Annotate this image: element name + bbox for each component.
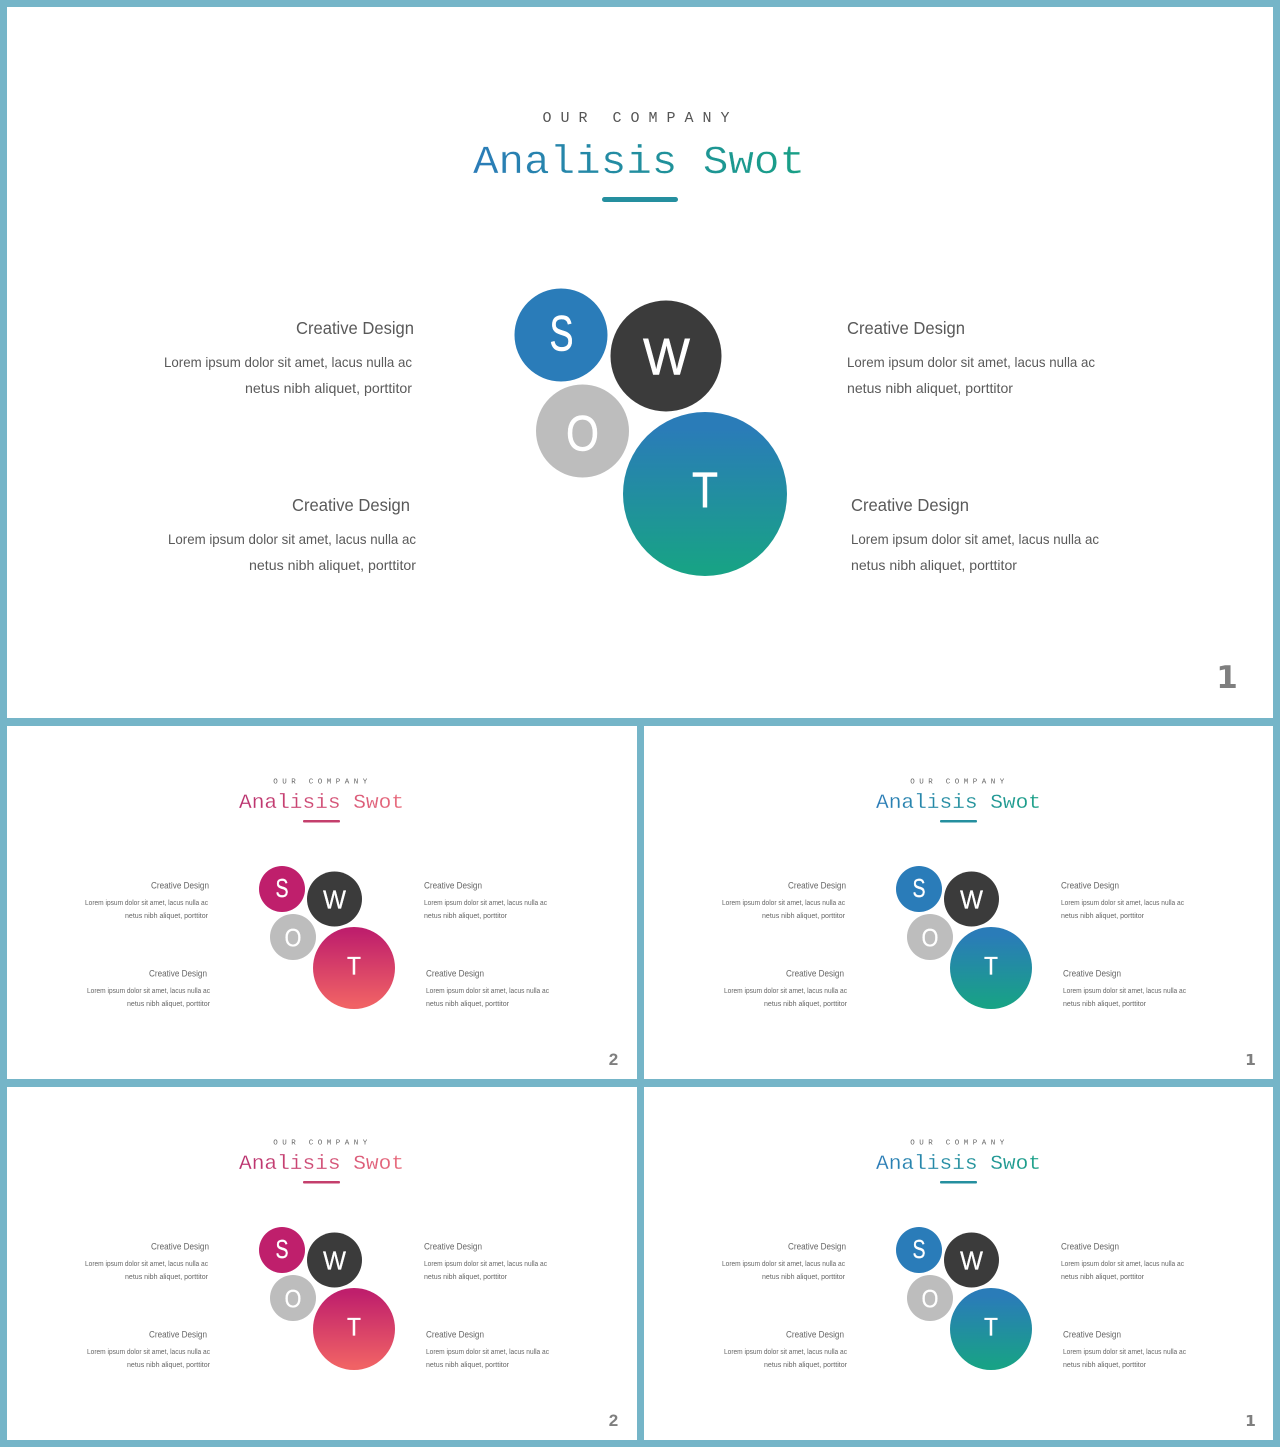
page number: 2: [609, 1411, 618, 1430]
title: Analisis Swot: [239, 792, 404, 815]
text block: top left: [722, 1242, 846, 1281]
text block: bottom right: netus nibh aliquet, porttitor: [1063, 1001, 1147, 1008]
text block: bottom right: [1063, 1330, 1187, 1369]
text block: top left: Lorem ipsum dolor sit amet, lacus nulla ac: [722, 1261, 846, 1268]
text block: top right: Lorem ipsum dolor sit amet, lacus nulla ac: [1061, 900, 1185, 907]
text block: bottom left: [724, 968, 848, 1008]
text block: bottom left: netus nibh aliquet, porttitor: [764, 1001, 848, 1008]
eyebrow: our company: OUR COMPANY: [910, 778, 1005, 786]
circle: S: [896, 1227, 942, 1273]
panel: main slide (blue): [7, 7, 1273, 718]
text block: top left: netus nibh aliquet, porttitor: [762, 913, 846, 920]
text block: bottom right: Lorem ipsum dolor sit amet, lacus nulla ac: [426, 988, 550, 995]
text block: bottom right: Lorem ipsum dolor sit amet, lacus nulla ac: [426, 1349, 550, 1356]
text block: top left: netus nibh aliquet, porttitor: [762, 1274, 846, 1281]
text block: top right: [1061, 880, 1185, 920]
panel: small slide bottom left (pink): [7, 1087, 637, 1440]
title underline: [303, 820, 340, 822]
circle: O: [270, 1275, 316, 1321]
text block: bottom right: Creative Design: [426, 1330, 484, 1340]
text block: top left: [722, 880, 846, 920]
page number: 1: [1245, 1051, 1256, 1069]
circle: T: T: [984, 1314, 998, 1342]
circle: O: [270, 914, 316, 960]
circle: O: [907, 914, 953, 960]
eyebrow: our company: OUR COMPANY: [273, 778, 368, 786]
text block: top left: [164, 318, 414, 396]
circle: S: [514, 288, 608, 382]
text block: top left: Lorem ipsum dolor sit amet, lacus nulla ac: [164, 354, 412, 370]
text block: top left: netus nibh aliquet, porttitor: [125, 1274, 209, 1281]
text block: bottom left: netus nibh aliquet, porttitor: [764, 1362, 848, 1369]
title underline: [940, 1181, 977, 1184]
text block: bottom right: Lorem ipsum dolor sit amet, lacus nulla ac: [1063, 1349, 1187, 1356]
text block: top right: Creative Design: [847, 318, 965, 338]
text block: bottom right: Creative Design: [426, 968, 484, 978]
text block: bottom right: [426, 968, 550, 1008]
circle: T: [623, 412, 787, 576]
text block: top right: Creative Design: [1061, 1242, 1119, 1252]
text block: top left: Creative Design: [788, 1242, 846, 1252]
page number: 1: [1245, 1412, 1256, 1430]
title underline: [940, 820, 977, 822]
circle: S: [259, 866, 305, 912]
text block: top left: Lorem ipsum dolor sit amet, lacus nulla ac: [85, 1261, 209, 1268]
circle: W: W: [323, 1246, 346, 1276]
text block: bottom left: Lorem ipsum dolor sit amet, lacus nulla ac: [87, 1349, 211, 1356]
circle: O: O: [922, 924, 938, 952]
text block: bottom left: Lorem ipsum dolor sit amet, lacus nulla ac: [87, 988, 211, 995]
circle: W: [944, 1232, 999, 1288]
circle: O: O: [922, 1286, 938, 1314]
text block: bottom left: netus nibh aliquet, porttitor: [127, 1362, 211, 1369]
circle: O: O: [284, 1286, 302, 1314]
eyebrow: our company: OUR COMPANY: [273, 1140, 368, 1148]
text block: bottom right: netus nibh aliquet, porttitor: [1063, 1362, 1147, 1369]
title: Analisis Swot: [876, 792, 1041, 815]
title: Analisis Swot: [239, 1153, 404, 1176]
panel: small slide top left (pink): [7, 726, 637, 1079]
text block: bottom right: Creative Design: [1063, 968, 1121, 978]
text block: bottom right: netus nibh aliquet, porttitor: [426, 1001, 510, 1008]
title: Analisis Swot: [473, 141, 805, 186]
title: Analisis Swot: [876, 1153, 1041, 1176]
text block: bottom left: Lorem ipsum dolor sit amet, lacus nulla ac: [724, 1349, 848, 1356]
text block: top right: netus nibh aliquet, porttitor: [424, 1274, 508, 1281]
page number: 1: [1216, 660, 1238, 696]
circle: T: [313, 1288, 395, 1370]
title underline: [303, 1181, 340, 1184]
circle: W: W: [643, 328, 690, 386]
circle: S: S: [912, 1234, 926, 1264]
circle: T: [313, 927, 395, 1009]
text block: top right: Creative Design: [424, 880, 482, 890]
circle: S: S: [276, 1234, 288, 1264]
circle: T: [950, 1288, 1032, 1370]
text block: top left: [85, 1242, 209, 1281]
circle: S: [896, 866, 942, 912]
text block: bottom left: Creative Design: [786, 1330, 844, 1340]
circle: T: T: [692, 462, 718, 518]
circle: W: [307, 872, 362, 926]
text block: top left: Creative Design: [296, 318, 414, 338]
circle: O: O: [566, 406, 599, 462]
circle: S: S: [550, 306, 574, 362]
text block: bottom right: Lorem ipsum dolor sit amet, lacus nulla ac: [1063, 988, 1187, 995]
text block: bottom right: Lorem ipsum dolor sit amet, lacus nulla ac: [851, 531, 1099, 547]
text block: top right: netus nibh aliquet, porttitor: [424, 913, 508, 920]
circle: S: [259, 1227, 305, 1273]
text block: bottom left: Lorem ipsum dolor sit amet, lacus nulla ac: [724, 988, 848, 995]
text block: top right: Creative Design: [1061, 880, 1119, 890]
text block: top right: netus nibh aliquet, porttitor: [1061, 1274, 1145, 1281]
text block: top left: Creative Design: [788, 880, 846, 890]
text block: top right: Lorem ipsum dolor sit amet, lacus nulla ac: [424, 900, 548, 907]
circle: W: [307, 1232, 362, 1288]
text block: top left: Lorem ipsum dolor sit amet, lacus nulla ac: [85, 900, 209, 907]
text block: bottom left: Creative Design: [149, 968, 207, 978]
text block: top right: netus nibh aliquet, porttitor: [847, 380, 1013, 396]
text block: bottom left: Creative Design: [786, 968, 844, 978]
circle: W: [944, 872, 999, 926]
title underline: [602, 197, 678, 202]
text block: bottom right: [1063, 968, 1187, 1008]
text block: top right: [1061, 1242, 1185, 1281]
text block: bottom right: [851, 495, 1099, 573]
text block: top right: netus nibh aliquet, porttitor: [1061, 913, 1145, 920]
circle: O: [907, 1275, 953, 1321]
circle: T: [950, 927, 1032, 1009]
text block: top left: netus nibh aliquet, porttitor: [125, 913, 209, 920]
text block: bottom right: netus nibh aliquet, porttitor: [851, 557, 1017, 573]
circle: W: W: [960, 884, 983, 914]
circle: S: S: [912, 873, 926, 903]
text block: top left: netus nibh aliquet, porttitor: [245, 380, 412, 396]
eyebrow: our company: OUR COMPANY: [542, 110, 730, 127]
circle: W: W: [960, 1246, 983, 1276]
circle: S: S: [276, 873, 288, 903]
text block: top left: Creative Design: [151, 880, 209, 890]
panel: small slide top right (blue): [644, 726, 1273, 1079]
text block: bottom left: netus nibh aliquet, porttitor: [127, 1001, 211, 1008]
text block: top right: [847, 318, 1095, 396]
text block: top left: Lorem ipsum dolor sit amet, lacus nulla ac: [722, 900, 846, 907]
text block: bottom left: [168, 495, 416, 573]
text block: bottom left: [724, 1330, 848, 1369]
text block: top right: [424, 880, 548, 920]
text block: bottom right: netus nibh aliquet, porttitor: [426, 1362, 510, 1369]
text block: top left: Creative Design: [151, 1242, 209, 1252]
circle: W: [610, 300, 722, 412]
circle: O: [536, 384, 629, 478]
circle: T: T: [347, 1314, 361, 1342]
text block: bottom right: Creative Design: [851, 495, 969, 515]
text block: top right: Lorem ipsum dolor sit amet, lacus nulla ac: [1061, 1261, 1185, 1268]
circle: W: W: [323, 884, 346, 914]
text block: bottom left: netus nibh aliquet, porttitor: [249, 557, 416, 573]
text block: bottom left: Lorem ipsum dolor sit amet, lacus nulla ac: [168, 531, 416, 547]
circle: T: T: [984, 952, 998, 980]
text block: bottom right: [426, 1330, 550, 1369]
text block: top right: Lorem ipsum dolor sit amet, lacus nulla ac: [847, 354, 1095, 370]
eyebrow: our company: OUR COMPANY: [910, 1140, 1005, 1148]
circle: T: T: [347, 952, 361, 980]
text block: bottom right: Creative Design: [1063, 1330, 1121, 1340]
text block: bottom left: [87, 1330, 211, 1369]
text block: top left: [85, 880, 209, 920]
panel: small slide bottom right (blue): [644, 1087, 1273, 1440]
text block: top right: Creative Design: [424, 1242, 482, 1252]
page number: 2: [609, 1050, 618, 1069]
text block: top right: Lorem ipsum dolor sit amet, lacus nulla ac: [424, 1261, 548, 1268]
text block: bottom left: Creative Design: [149, 1330, 207, 1340]
text block: bottom left: [87, 968, 211, 1008]
text block: top right: [424, 1242, 548, 1281]
text block: bottom left: Creative Design: [292, 495, 410, 515]
circle: O: O: [284, 924, 302, 952]
